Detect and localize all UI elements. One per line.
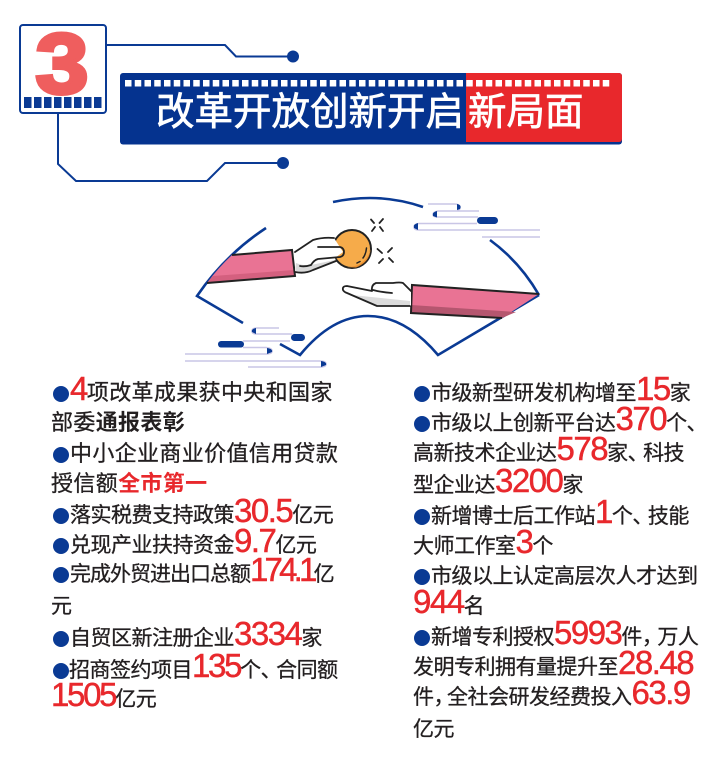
item: free trade zone: 自贸区新注册企业3334家 <box>70 615 322 652</box>
item: postdoc stations: 新增博士后工作站1个、技能 <box>431 493 689 530</box>
item: patents: 件，全社会研发经费投入63.9 <box>413 674 690 711</box>
item: SME credit <box>51 441 338 496</box>
section number chip with circuit lines <box>19 17 299 182</box>
item: innovation platforms: 市级以上创新平台达370个、 <box>431 400 707 437</box>
item: high-level talent <box>413 564 698 620</box>
item: investment: 1505亿元 <box>51 676 156 713</box>
item: innovation platforms <box>413 400 707 499</box>
fan outline <box>197 198 539 355</box>
item: investment <box>51 647 338 713</box>
item: investment: 招商签约项目135个、合同额 <box>69 647 338 684</box>
item: high-level talent: 市级以上认定高层次人才达到 <box>431 565 698 588</box>
item: innovation platforms: 高新技术企业达578家、科技 <box>413 430 684 467</box>
streaks: upper right <box>414 204 540 237</box>
item: R&D institutions: 市级新型研发机构增至15家 <box>431 370 690 407</box>
chip pins <box>24 97 102 108</box>
right hand <box>343 282 411 306</box>
circuit line: upper <box>107 45 299 62</box>
item: industry funds: 兑现产业扶持资金9.7亿元 <box>70 522 316 559</box>
item: 4 reform results <box>51 370 333 435</box>
right column list <box>413 370 707 741</box>
item: 4 reform results: 4项改革成果获中央和国家 <box>70 370 333 407</box>
item: patents: 新增专利授权5993件，万人 <box>431 614 698 651</box>
item: tax support: 落实税费支持政策30.5亿元 <box>70 492 333 529</box>
title text: blue part: 改革开放创新开启 <box>156 91 464 134</box>
item: innovation platforms: 型企业达3200家 <box>413 462 583 499</box>
banner background: blue and red <box>120 73 622 144</box>
item: SME credit: 授信额全市第一 <box>51 471 207 496</box>
title text: red part: 新局面 <box>468 91 584 134</box>
item: patents: 亿元 <box>413 718 454 741</box>
coin <box>333 230 371 268</box>
item: foreign trade <box>51 551 334 618</box>
illustration: hands passing a coin <box>185 196 540 368</box>
circuit line: lower <box>58 113 289 181</box>
item: patents <box>413 614 698 741</box>
item: high-level talent: 944名 <box>413 583 484 620</box>
sparkles <box>371 219 393 263</box>
item: 4 reform results: 部委通报表彰 <box>51 410 185 435</box>
item: foreign trade: 元 <box>51 595 72 618</box>
item: postdoc stations <box>413 493 689 560</box>
item: postdoc stations: 大师工作室3个 <box>413 523 553 560</box>
item: foreign trade: 完成外贸进出口总额174.1亿 <box>70 551 334 588</box>
numeral 3: 3 <box>36 17 88 112</box>
left arm <box>207 250 295 283</box>
streaks: lower left <box>185 328 326 367</box>
chip box <box>20 25 106 113</box>
right arm <box>411 285 539 318</box>
title banner <box>120 73 622 144</box>
item: patents: 发明专利拥有量提升至28.48 <box>413 644 693 681</box>
item: SME credit: 中小企业商业价值信用贷款 <box>70 441 338 466</box>
left column list <box>51 370 338 713</box>
left hand <box>295 238 344 273</box>
